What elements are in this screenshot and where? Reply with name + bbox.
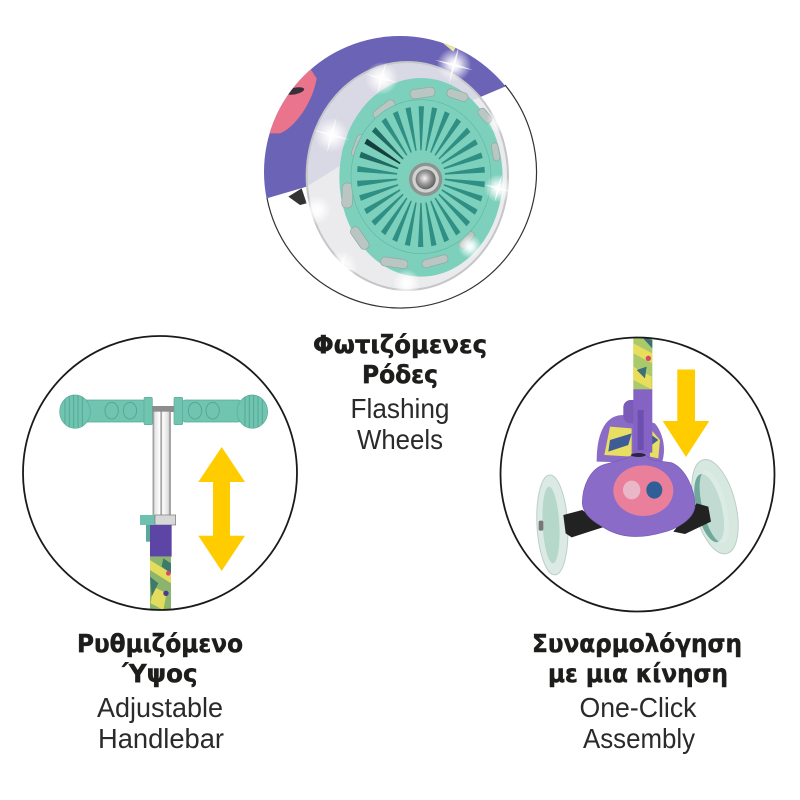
pink sticker bbox=[270, 70, 317, 134]
title: adjustable handlebar: Adjustable bbox=[97, 692, 223, 723]
title: one-click assembly bbox=[532, 629, 742, 754]
yellow pattern hint bbox=[442, 43, 456, 52]
translucent wheel rim bbox=[307, 62, 508, 290]
title: flashing wheels: Flashing bbox=[350, 393, 450, 424]
title: adjustable handlebar: Ύψος bbox=[122, 659, 198, 688]
title: flashing wheels: Φωτιζόμενες bbox=[313, 330, 487, 359]
scooter body behind wheel bbox=[264, 36, 506, 198]
rear deck bbox=[597, 415, 664, 463]
right wheel bbox=[691, 459, 739, 554]
title: adjustable handlebar bbox=[77, 629, 243, 754]
purple tube bbox=[150, 525, 172, 557]
sparkles bbox=[302, 41, 515, 297]
title: flashing wheels: Ρόδες bbox=[362, 360, 438, 389]
title: flashing wheels bbox=[313, 330, 487, 455]
title: adjustable handlebar: Ρυθμιζόμενο bbox=[77, 629, 243, 658]
telescopic stem bbox=[153, 412, 171, 516]
purple pole bbox=[633, 389, 652, 453]
front body bbox=[582, 454, 695, 536]
title: flashing wheels: Wheels bbox=[357, 424, 443, 455]
title: one-click assembly: Συναρμολόγηση bbox=[532, 629, 742, 658]
panel: flashing wheels photo bbox=[260, 20, 540, 308]
panel: adjustable handlebar photo bbox=[23, 336, 297, 612]
mint disc bbox=[339, 78, 503, 277]
black axle bbox=[288, 188, 307, 205]
title: one-click assembly: με μια κίνηση bbox=[548, 659, 728, 688]
panel: one-click assembly photo bbox=[500, 337, 774, 612]
title: adjustable handlebar: Handlebar bbox=[98, 723, 224, 754]
handlebar grips bbox=[60, 395, 268, 428]
black axles bbox=[563, 503, 711, 537]
left wheel bbox=[534, 474, 570, 576]
patterned tube bbox=[150, 557, 171, 612]
patterned pole bbox=[633, 337, 652, 390]
sticker slot bbox=[288, 87, 304, 95]
crossbar bbox=[152, 406, 174, 412]
height clamp bbox=[140, 515, 176, 542]
title: one-click assembly: One-Click bbox=[580, 692, 697, 723]
arrow: down bbox=[663, 370, 709, 457]
light slots bbox=[342, 87, 501, 269]
title: one-click assembly: Assembly bbox=[583, 723, 695, 754]
arrow: up and down bbox=[198, 447, 245, 571]
centre bolt bbox=[409, 163, 442, 196]
pink sticker bbox=[613, 465, 673, 516]
hub with radial fins bbox=[351, 100, 491, 254]
